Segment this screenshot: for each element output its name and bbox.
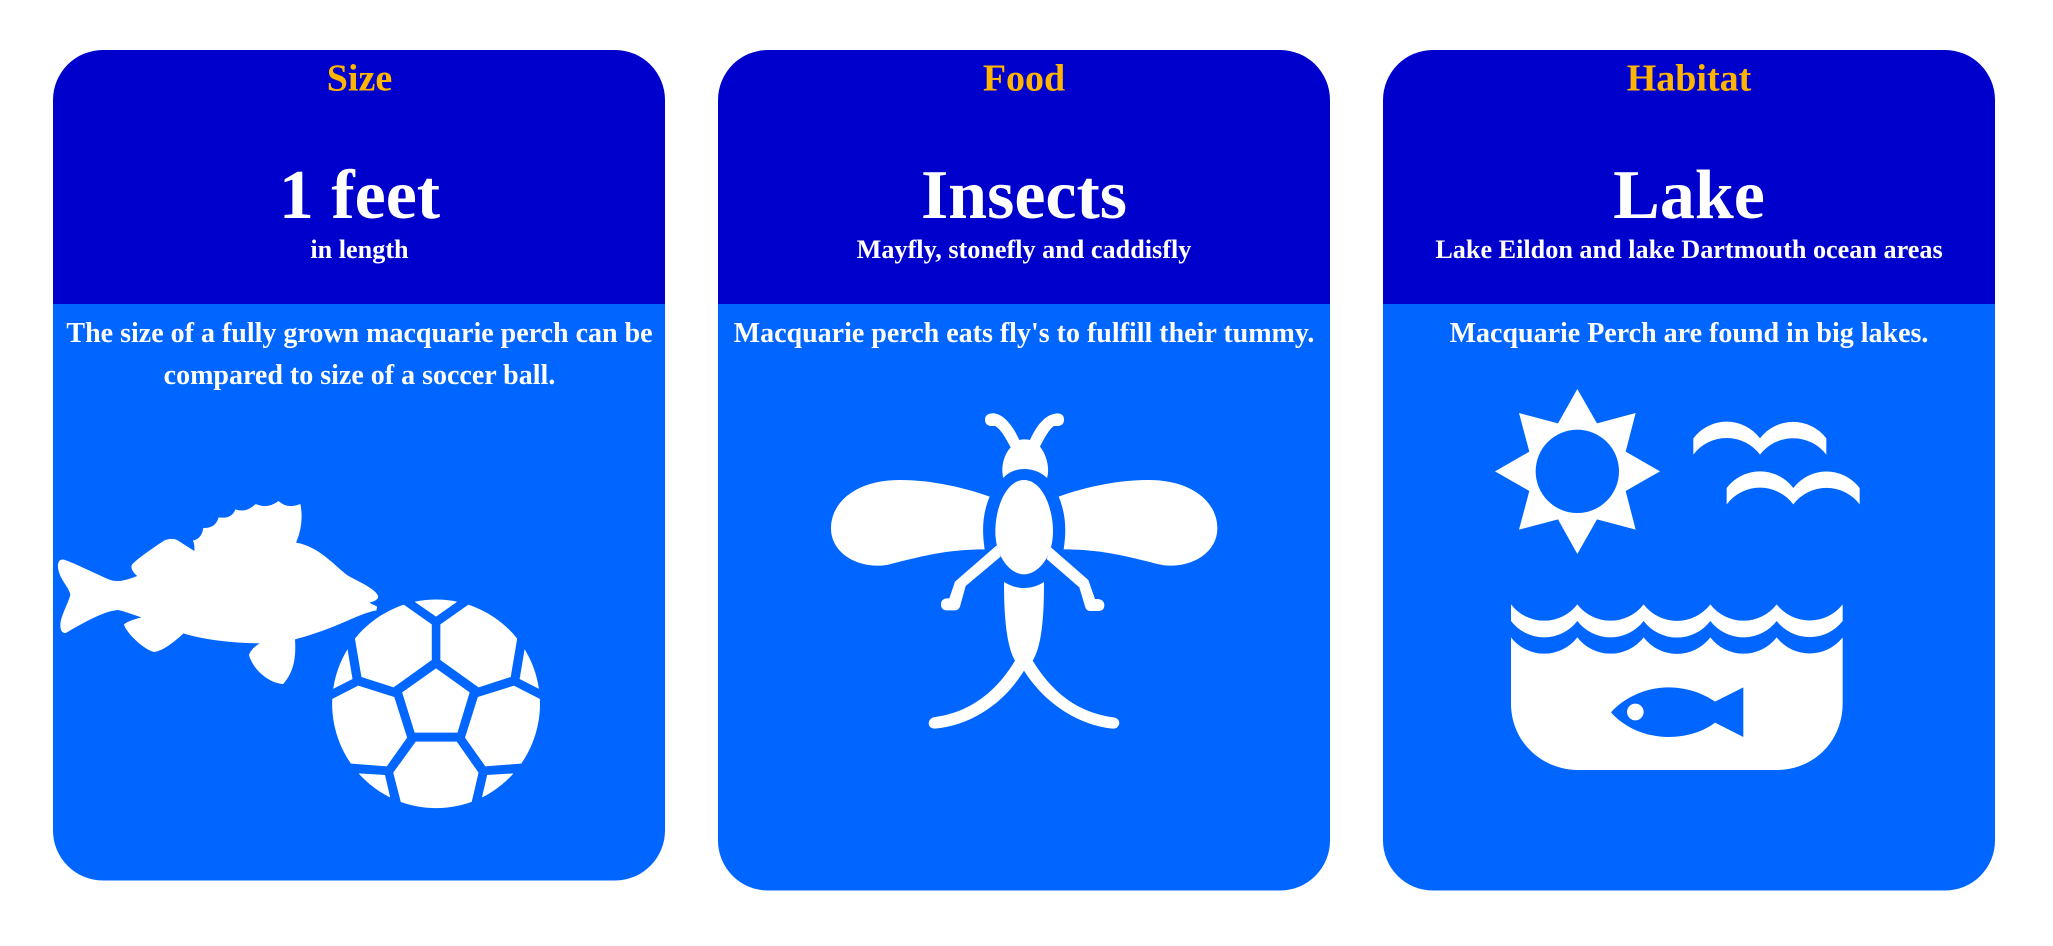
icon: sun — [1495, 389, 1660, 554]
description: food: Macquarie perch eats fly's to fulfill their tummy. — [734, 318, 1314, 349]
big value: insects: Insects — [921, 157, 1127, 234]
panel: size — [53, 50, 665, 880]
icon: perch fish — [58, 501, 378, 684]
icon: birds — [1693, 422, 1860, 504]
description: habitat: Macquarie Perch are found in big lakes. — [1450, 318, 1928, 349]
icon: small fish — [1611, 687, 1743, 737]
heading: size: Size — [327, 58, 392, 100]
sub value: insect types: Mayfly, stonefly and caddisfly — [857, 235, 1191, 264]
description: size — [66, 318, 653, 391]
big value: 1 feet: 1 feet — [279, 157, 440, 234]
icon: lake scene — [1495, 389, 1860, 770]
icon: water body — [1511, 637, 1843, 770]
sub value: in length: in length — [310, 235, 409, 264]
icon: mayfly — [831, 413, 1217, 729]
panel body: habitat — [1383, 300, 1995, 890]
panel header: size — [53, 50, 665, 304]
panel header: food — [718, 50, 1330, 304]
heading: habitat: Habitat — [1627, 58, 1752, 100]
panel body: food — [718, 300, 1330, 890]
description: size: compared to size of a soccer ball. — [164, 360, 555, 391]
description: size: The size of a fully grown macquarie perch can be — [66, 318, 653, 349]
panel body: size — [53, 300, 665, 880]
icon: waves — [1511, 604, 1843, 638]
big value: lake: Lake — [1613, 157, 1765, 234]
sub value: lake names: Lake Eildon and lake Dartmouth ocean areas — [1435, 235, 1943, 264]
panel: habitat — [1383, 50, 1995, 890]
panel header: habitat — [1383, 50, 1995, 304]
panel: food — [718, 50, 1330, 890]
icon: soccer ball — [332, 600, 540, 808]
heading: food: Food — [983, 58, 1065, 100]
